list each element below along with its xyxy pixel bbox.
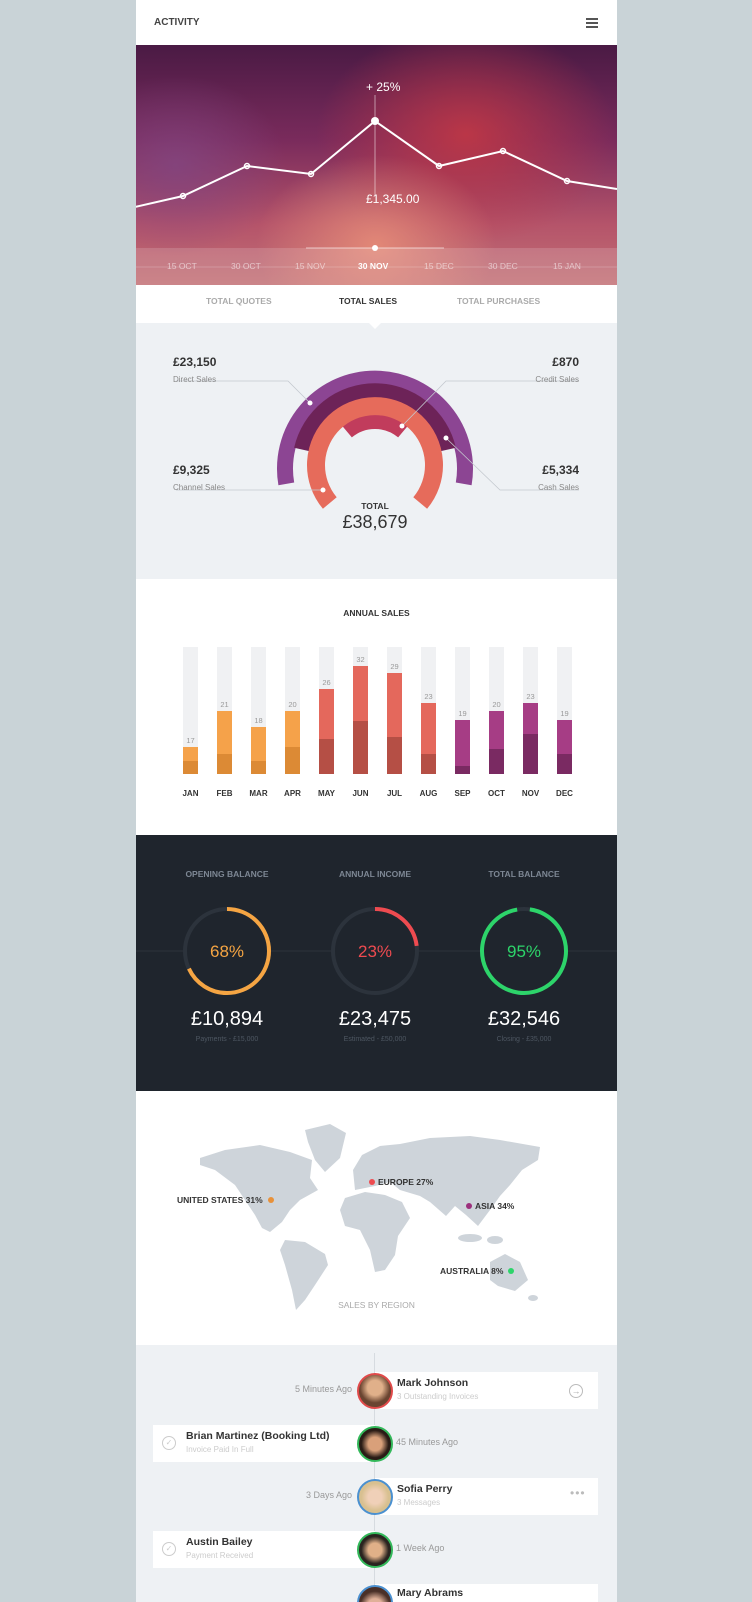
stat: annual income: Estimated - £50,000 <box>344 1036 406 1043</box>
stat: total balance: TOTAL BALANCE <box>488 869 560 879</box>
bar chart: 19 <box>560 709 569 718</box>
banner: line chart <box>136 45 617 285</box>
stat: annual income: ANNUAL INCOME <box>339 869 411 879</box>
bar chart: OCT <box>488 789 505 798</box>
stat: opening balance: Payments - £15,000 <box>196 1036 258 1043</box>
item: brian martinez: ✓ <box>166 1438 172 1447</box>
item: mark johnson: 3 Outstanding Invoices <box>397 1392 478 1401</box>
panel: sales by region map <box>136 1091 617 1345</box>
label: cash sales: £5,334 <box>542 463 579 477</box>
gauges <box>136 907 617 995</box>
item: austin bailey: 1 Week Ago <box>396 1543 444 1553</box>
panel: balances (dark) <box>136 835 617 1091</box>
stat: annual income <box>339 869 411 1043</box>
item: mary abrams: Mary Abrams <box>397 1587 463 1599</box>
label: credit sales <box>535 355 579 384</box>
stat: annual income: £23,475 <box>339 1008 411 1030</box>
bar chart: 20 <box>492 700 501 709</box>
bar chart: JAN <box>182 789 199 798</box>
icon: hamburger menu <box>586 18 598 28</box>
item: brian martinez: Brian Martinez (Booking Ltd) <box>186 1430 330 1442</box>
bar chart: JUN <box>352 789 369 798</box>
panel: activity timeline <box>136 1345 617 1602</box>
item: austin bailey: Austin Bailey <box>186 1536 253 1548</box>
text: value: £1,345.00 <box>366 192 419 206</box>
label: credit sales: Credit Sales <box>535 375 579 384</box>
tabs: TOTAL SALES <box>339 296 397 306</box>
date axis labels: 30 OCT <box>231 261 261 271</box>
date axis labels: 15 NOV <box>295 261 325 271</box>
label: cash sales <box>538 463 579 492</box>
bar chart: 23 <box>424 692 433 701</box>
total: £38,679 <box>342 512 408 532</box>
label: channel sales <box>173 463 225 492</box>
header bar <box>136 0 617 45</box>
total <box>342 501 408 532</box>
notch <box>369 323 381 329</box>
label: direct sales <box>173 355 216 384</box>
label: direct sales: Direct Sales <box>173 375 216 384</box>
item: brian martinez: 45 Minutes Ago <box>396 1437 458 1447</box>
tabs: TOTAL QUOTES <box>206 296 272 306</box>
item: austin bailey: ✓ <box>166 1544 172 1553</box>
bar chart: FEB <box>216 789 233 798</box>
label: channel sales: Channel Sales <box>173 483 225 492</box>
text: +25%: + 25% <box>366 80 400 94</box>
item: mark johnson <box>295 1372 598 1409</box>
item: mark johnson: 5 Minutes Ago <box>295 1384 352 1394</box>
stat: total balance <box>488 869 560 1043</box>
heading: ANNUAL SALES <box>343 608 410 618</box>
marker: australia: AUSTRALIA 8% <box>440 1266 503 1276</box>
gauges: 95% <box>507 942 541 961</box>
bar chart: 21 <box>220 700 229 709</box>
stat: opening balance: OPENING BALANCE <box>185 869 269 879</box>
date axis labels: 15 JAN <box>553 261 581 271</box>
marker: united states: UNITED STATES 31% <box>177 1195 263 1205</box>
date axis labels: 15 OCT <box>167 261 197 271</box>
panel: annual sales bar chart <box>136 579 617 835</box>
item: sofia perry: Sofia Perry <box>397 1483 452 1495</box>
item: brian martinez <box>153 1425 458 1462</box>
label: channel sales: £9,325 <box>173 463 210 477</box>
item: sofia perry: ••• <box>570 1486 586 1500</box>
bar chart: AUG <box>420 789 437 798</box>
label: credit sales: £870 <box>552 355 579 369</box>
bar chart: APR <box>284 789 301 798</box>
bar chart: 32 <box>356 655 365 664</box>
marker: europe: EUROPE 27% <box>378 1177 433 1187</box>
date axis labels <box>167 261 581 271</box>
item: sofia perry <box>306 1478 598 1515</box>
item: sofia perry: 3 Messages <box>397 1498 440 1507</box>
bar chart: 17 <box>186 736 195 745</box>
gauges: 23% <box>358 942 392 961</box>
total: TOTAL <box>361 501 389 511</box>
bar chart: SEP <box>454 789 471 798</box>
bar chart: NOV <box>522 789 540 798</box>
item: brian martinez: Invoice Paid In Full <box>186 1445 254 1454</box>
stat: total balance: £32,546 <box>488 1008 560 1030</box>
item: mark johnson: → <box>572 1386 580 1396</box>
caption: SALES BY REGION <box>338 1300 415 1310</box>
date axis labels: 30 NOV <box>358 261 388 271</box>
stat: total balance: Closing - £35,000 <box>497 1036 551 1043</box>
marker: asia: ASIA 34% <box>475 1201 514 1211</box>
bar chart: DEC <box>556 789 573 798</box>
bar chart: 29 <box>390 662 399 671</box>
stat: opening balance <box>185 869 269 1043</box>
tabs: TOTAL PURCHASES <box>457 296 540 306</box>
bar chart: 18 <box>254 716 263 725</box>
bar chart: 19 <box>458 709 467 718</box>
label: cash sales: Cash Sales <box>538 483 579 492</box>
item: austin bailey: Payment Received <box>186 1551 253 1560</box>
item: austin bailey <box>153 1531 444 1568</box>
item: mark johnson: Mark Johnson <box>397 1377 468 1389</box>
bar chart: 20 <box>288 700 297 709</box>
title: activity: ACTIVITY <box>154 17 200 28</box>
date axis labels: 15 DEC <box>424 261 454 271</box>
date axis labels: 30 DEC <box>488 261 518 271</box>
bar chart <box>182 647 573 798</box>
item: mary abrams <box>357 1584 598 1602</box>
bar chart: MAY <box>318 789 336 798</box>
tabs <box>136 285 617 323</box>
bar chart: 26 <box>322 678 331 687</box>
panel: sales breakdown <box>136 323 617 579</box>
bar chart: 23 <box>526 692 535 701</box>
bar chart: MAR <box>249 789 268 798</box>
label: direct sales: £23,150 <box>173 355 216 369</box>
stat: opening balance: £10,894 <box>191 1008 263 1030</box>
chart: concentric arcs <box>176 370 579 509</box>
gauges: 68% <box>210 942 244 961</box>
bar chart: JUL <box>387 789 402 798</box>
item: sofia perry: 3 Days Ago <box>306 1490 352 1500</box>
